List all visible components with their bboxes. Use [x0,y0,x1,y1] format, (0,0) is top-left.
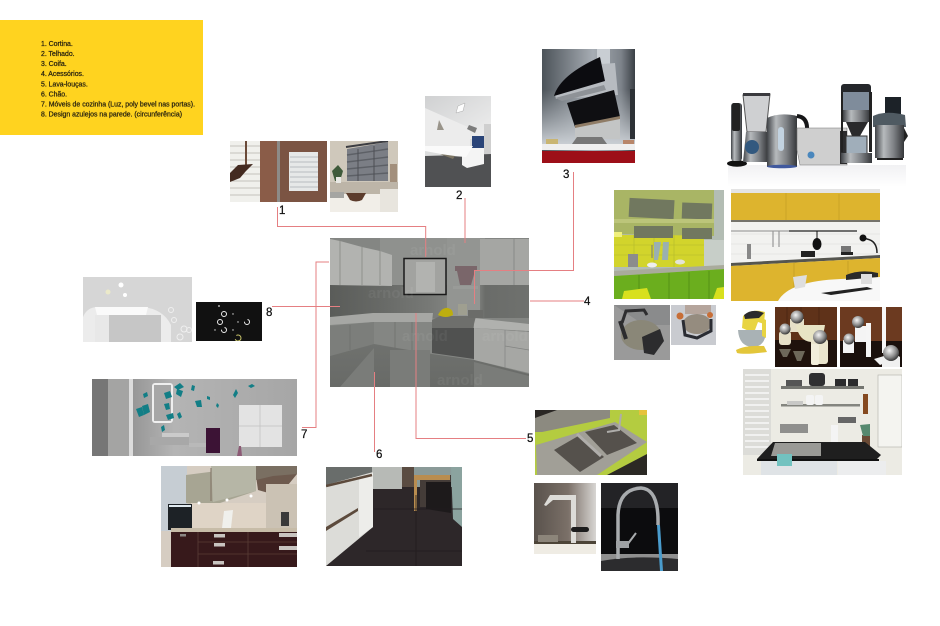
right upper cabinets [480,239,529,285]
watermark: arnold [437,372,483,389]
wall above stove [447,238,480,316]
icon: juicer [873,97,908,160]
watermark: arnold [402,328,448,345]
legend panel [0,20,203,135]
watermark: arnold [482,328,528,345]
connector 3 [474,172,574,304]
photo: kitchen shelves and sink [743,369,902,475]
back wall [330,285,529,318]
photo: wall tile with mirror [83,277,192,342]
photo: wooden blinds [230,141,327,202]
legend list: 5. Lava-louças. [41,82,88,88]
legend list: 3. Coifa. [41,61,67,68]
icon: hand blender [727,103,747,167]
number labels: 4 [584,296,591,308]
connector 4 [530,300,584,302]
legend list: 2. Telhado. [41,51,75,58]
counter top [330,313,433,325]
connector 6 [374,372,376,452]
number labels: 6 [376,449,382,461]
number labels [266,169,591,461]
connector lines [272,172,584,452]
photo: brown kitchen with lit cabinets [161,466,297,567]
watermark: arnold [368,285,414,302]
legend list: 8. Design azulejos na parede. (circunferência) [41,112,182,118]
central kitchen render [330,238,529,389]
photo: green kitchen [614,190,724,299]
photo: white canisters [840,307,902,367]
photo: canisters on wood [775,307,837,367]
number labels: 5 [527,433,533,445]
icon: kettle [767,114,807,168]
legend list: 6. Chão. [41,92,67,98]
lower cabinets left [330,322,374,356]
icon: blender [743,93,770,162]
floor reflections [340,348,529,387]
connector 7 [302,262,329,428]
photo: small appliances [727,84,908,187]
legend list [41,41,195,118]
icon: yellow stand mixer [736,311,767,354]
watermark [368,242,528,389]
number labels: 8 [266,307,272,319]
number labels: 2 [456,190,462,202]
stove [432,328,474,359]
connector 8 [272,306,340,308]
upper wall [380,238,485,293]
floor [330,344,529,387]
legend list: 7. Móveis de cozinha (Luz, poly bevel nas portas). [41,102,195,108]
lower cabinets right [474,328,529,373]
photo: square faucet [534,483,596,554]
appliance reflection [728,165,906,187]
bottle and pot [458,304,467,315]
number labels: 3 [563,169,569,181]
window [404,258,446,294]
connector 1 [278,207,426,257]
connector 5 [416,313,526,438]
photo: cooker hood [542,49,635,163]
photo: basket carried by hands [671,305,716,345]
number labels: 1 [279,205,285,217]
photo: arched faucet with water [601,483,678,571]
icon: toaster [797,128,847,165]
photo: dark basket in pot [614,305,670,360]
legend list: 4. Acessórios. [41,71,84,78]
photo: white ceiling kitchen [425,96,491,187]
utensil rack [455,266,477,285]
icon: coffee maker [841,84,872,163]
watermark: arnold [410,242,456,259]
photo: yellow kitchen [731,189,880,301]
left upper cabinets [330,239,392,286]
connector 2 [464,198,466,243]
legend list: 1. Cortina. [41,41,73,48]
photo: dark tile floor [326,467,462,566]
photo: double steel sink [535,410,647,475]
number labels: 7 [301,429,307,441]
photo: hexagon wall with teal tiles [92,379,297,456]
yellow kettle [438,308,453,317]
photo: grey blinds [330,141,398,212]
photo: dark tile with circles [196,302,262,341]
